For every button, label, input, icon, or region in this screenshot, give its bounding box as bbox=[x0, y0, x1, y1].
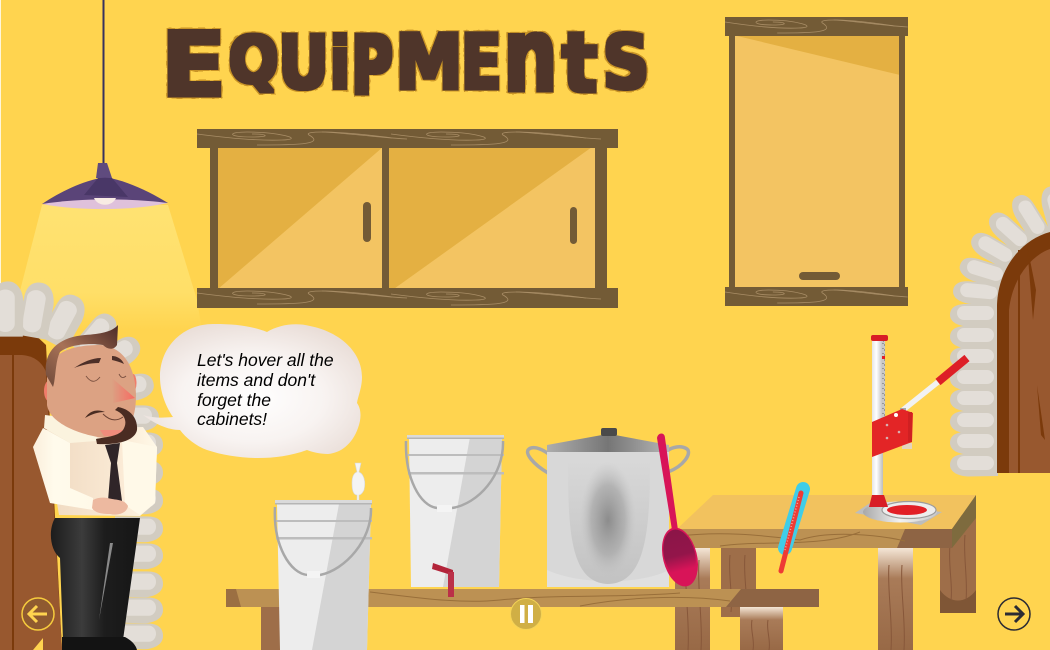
title: Q bbox=[229, 24, 279, 98]
bucket with airlock bbox=[275, 463, 372, 650]
tall wall cabinet bbox=[725, 17, 908, 306]
chin blush bbox=[100, 430, 124, 436]
shelf plank bbox=[226, 589, 819, 607]
capper top cap bbox=[871, 335, 888, 341]
bucket handle bbox=[275, 507, 371, 578]
title: U bbox=[278, 21, 329, 106]
airlock bbox=[352, 463, 365, 501]
right door with stone arch bbox=[950, 184, 1050, 476]
spigot handle bbox=[406, 441, 503, 512]
title: E bbox=[161, 14, 226, 117]
red spoon bbox=[656, 434, 704, 590]
capper lever bbox=[900, 358, 967, 414]
hands bbox=[92, 498, 128, 515]
left door handle bbox=[363, 202, 371, 242]
next arrow button bbox=[998, 598, 1030, 630]
left door with stone arch bbox=[0, 280, 163, 650]
bucket body bbox=[277, 504, 371, 650]
right door bbox=[997, 232, 1050, 473]
bucket with spigot bbox=[406, 435, 504, 597]
wall cabinet: double sliding doors bbox=[197, 129, 618, 308]
trousers bbox=[51, 518, 140, 650]
thermometer bbox=[781, 489, 803, 571]
ears bbox=[44, 374, 136, 402]
title: i bbox=[330, 23, 350, 106]
shirt bbox=[33, 427, 157, 516]
eyebrows bbox=[74, 356, 124, 368]
speech text: forget the bbox=[197, 390, 271, 410]
title: t bbox=[562, 14, 597, 112]
closed eyes bbox=[86, 374, 126, 381]
speech text: cabinets! bbox=[197, 409, 267, 429]
lamp light cone bbox=[10, 205, 202, 330]
pendant lamp bbox=[42, 0, 168, 209]
left page edge bbox=[0, 0, 1, 650]
left door glass bbox=[218, 147, 383, 289]
top wooden plank bbox=[197, 129, 618, 148]
capper foot bbox=[869, 495, 888, 507]
tie bbox=[105, 443, 122, 501]
character: man with closed eyes bbox=[33, 325, 157, 650]
front table legs bbox=[675, 548, 913, 650]
right door glass bbox=[389, 147, 596, 291]
previous arrow button bbox=[22, 598, 54, 630]
capper bracket bbox=[872, 409, 913, 457]
left door bbox=[0, 330, 62, 650]
title: S bbox=[603, 20, 649, 106]
red spigot bbox=[432, 563, 454, 597]
capper column bbox=[872, 340, 883, 498]
neck and collar bbox=[44, 415, 102, 443]
title: M bbox=[395, 18, 463, 106]
table top bbox=[677, 495, 976, 529]
pot handles bbox=[528, 447, 688, 473]
hair bbox=[46, 325, 118, 387]
right stones bbox=[950, 184, 1050, 476]
stock pot bbox=[528, 428, 688, 587]
table front edge bbox=[677, 529, 952, 548]
table side bbox=[952, 495, 976, 548]
mouth bbox=[103, 414, 123, 420]
tall cabinet handle bbox=[799, 272, 840, 280]
bottle capper bbox=[855, 335, 967, 525]
back table legs bbox=[721, 515, 976, 617]
title: E bbox=[461, 20, 502, 107]
tall cabinet bottom plank bbox=[725, 287, 908, 306]
title: n bbox=[503, 0, 558, 115]
lid knob bbox=[601, 428, 617, 436]
moustache and beard bbox=[85, 407, 137, 444]
work table bbox=[675, 495, 976, 650]
title bbox=[161, 0, 649, 117]
speech text: Let's hover all the bbox=[197, 350, 334, 370]
bottom wooden plank bbox=[197, 288, 618, 308]
right door handle bbox=[570, 207, 577, 244]
title: P bbox=[351, 19, 393, 113]
left stones bbox=[0, 280, 163, 649]
capper base plate bbox=[855, 502, 942, 525]
shelf legs bbox=[261, 607, 783, 650]
pot lid bbox=[547, 435, 669, 452]
pause button bbox=[510, 598, 542, 630]
speech text: items and don't bbox=[197, 370, 316, 390]
speech bubble bbox=[143, 324, 362, 458]
nose bbox=[112, 378, 135, 403]
face bbox=[47, 345, 136, 438]
tall cabinet top plank bbox=[725, 17, 908, 36]
